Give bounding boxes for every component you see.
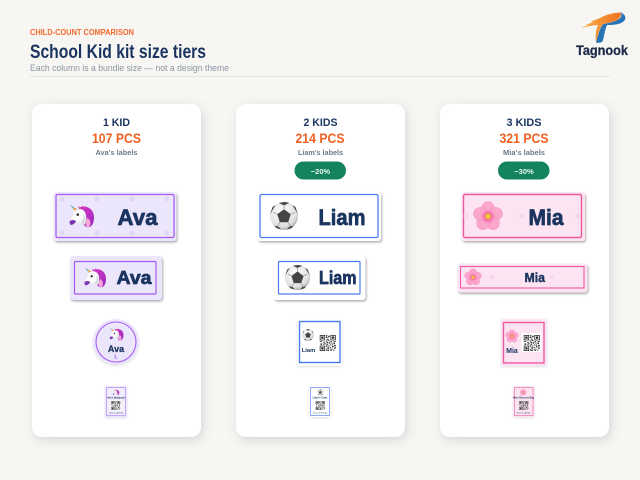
medium label: Liam: Liam [319,268,356,288]
square label: Mia: Mia [506,348,518,355]
piece count: 214 PCS [296,130,344,146]
name line: Mia's labels [503,150,545,157]
large label: Mia [462,192,585,241]
mini tag: Ava: Ava's Backpack [107,396,126,400]
tier heading: 1 KID [103,117,130,129]
logo: Tagnook [576,12,628,58]
tier heading: 2 KIDS [304,117,338,129]
mini tag: Mia [513,386,535,417]
mini tag: Mia: Scan to identify [517,412,530,414]
square label: Mia [501,319,547,366]
medium label: Ava [70,256,162,300]
panel: 3 kids [440,104,609,437]
name line: Liam's labels [298,150,343,157]
wide label: Mia [458,264,588,292]
mini tag: Liam: Scan to identify [313,412,327,414]
name line: Ava's labels [96,150,138,157]
panel: 2 kids [236,104,405,437]
discount badge: −20% [311,167,331,176]
panel: 1 kid [32,104,201,437]
large label: Liam [258,192,381,241]
discount badge [294,162,346,180]
mini tag: Mia: Mia's Blossom Bag [513,398,535,400]
large label: Mia: Mia [528,205,564,230]
round label: Ava: Ava [108,344,125,354]
header eyebrow: CHILD-COUNT COMPARISON [30,28,134,37]
tier heading: 3 KIDS [506,117,542,129]
subtitle: Each column is a bundle size — not a design theme [30,63,229,74]
medium label: Ava: Ava [116,268,153,288]
piece count: 321 PCS [500,130,548,146]
large label: Liam: Liam [318,205,366,230]
square label: Liam: Liam [302,348,315,354]
medium label: Liam [274,256,366,300]
round label: Ava [93,319,139,365]
mini tag: Liam: Liam's Gear [313,396,327,400]
large label: Ava: Ava [118,205,158,230]
mini tag: Liam [309,386,331,417]
mini tag: Ava [105,386,127,417]
wide label: Mia: Mia [524,271,546,285]
mini tag: Ava: Scan to identify [109,412,123,414]
discount badge [498,162,550,180]
large label: Ava [54,192,176,241]
logo mark [581,12,625,43]
piece count: 107 PCS [92,130,141,146]
discount badge: −30% [514,167,534,176]
round label: Ava: L [114,354,118,360]
logo wordmark: Tagnook [576,42,628,58]
title: School Kid kit size tiers [30,42,206,63]
square label: Liam [297,319,342,366]
